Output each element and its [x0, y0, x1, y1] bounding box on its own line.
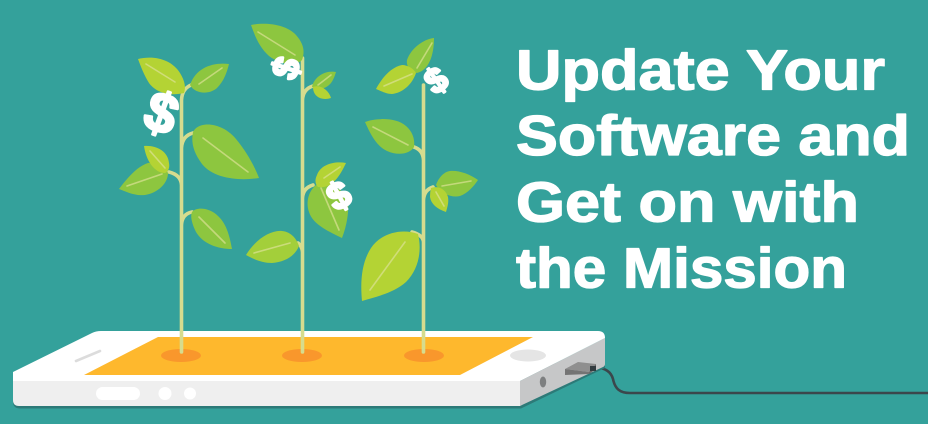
leaf: small right yellow [313, 86, 331, 99]
leaf: left middle [365, 119, 414, 154]
leaf: right green [436, 171, 478, 197]
leaf: small left yellow [144, 146, 169, 173]
plant left [119, 58, 259, 352]
phone screen [84, 337, 533, 375]
dollar sign top: $ [263, 52, 309, 84]
title: Get on with [516, 170, 859, 234]
leaf: top large [251, 24, 304, 64]
cable [594, 367, 928, 393]
home button [510, 350, 546, 362]
soil spot right [404, 349, 444, 362]
leaf: right yellow [315, 162, 346, 187]
dollar sign: $ [136, 78, 187, 148]
phone shadow [13, 360, 605, 408]
dollar sign lower: $ [320, 173, 359, 220]
smartphone [13, 331, 605, 408]
headphone jack [540, 376, 546, 388]
phone top face [13, 331, 605, 381]
leaf: top yellow [376, 65, 416, 94]
stem [412, 85, 433, 352]
leaf: right large green [308, 183, 348, 238]
front button pill [96, 387, 140, 400]
leaf: large lower [361, 232, 420, 301]
usb plug [565, 362, 596, 375]
plant middle [246, 24, 359, 352]
front button round left [158, 387, 172, 400]
title: Update Your [516, 38, 885, 102]
phone side panel [520, 338, 605, 406]
leaf: top right [190, 64, 229, 93]
title: Software and [516, 104, 910, 168]
leaf: top green [407, 38, 434, 73]
soil spot middle [282, 349, 322, 362]
stem [298, 58, 313, 352]
soil spot left [161, 349, 201, 362]
speaker slot [76, 351, 100, 361]
stem [169, 85, 193, 352]
leaf: right yellow [430, 187, 448, 212]
phone front edge [13, 378, 520, 406]
title: the Mission [516, 236, 847, 300]
leaf: lower right [191, 209, 232, 249]
front button round right [184, 388, 196, 400]
leaf: lower left [246, 231, 299, 263]
dollar sign: $ [417, 59, 456, 102]
plant right [361, 38, 478, 352]
title [516, 38, 910, 300]
leaf: small right green [312, 72, 336, 89]
leaf: large right [192, 124, 259, 179]
leaf: top yellow [138, 58, 185, 94]
leaf: small left green [119, 163, 168, 195]
